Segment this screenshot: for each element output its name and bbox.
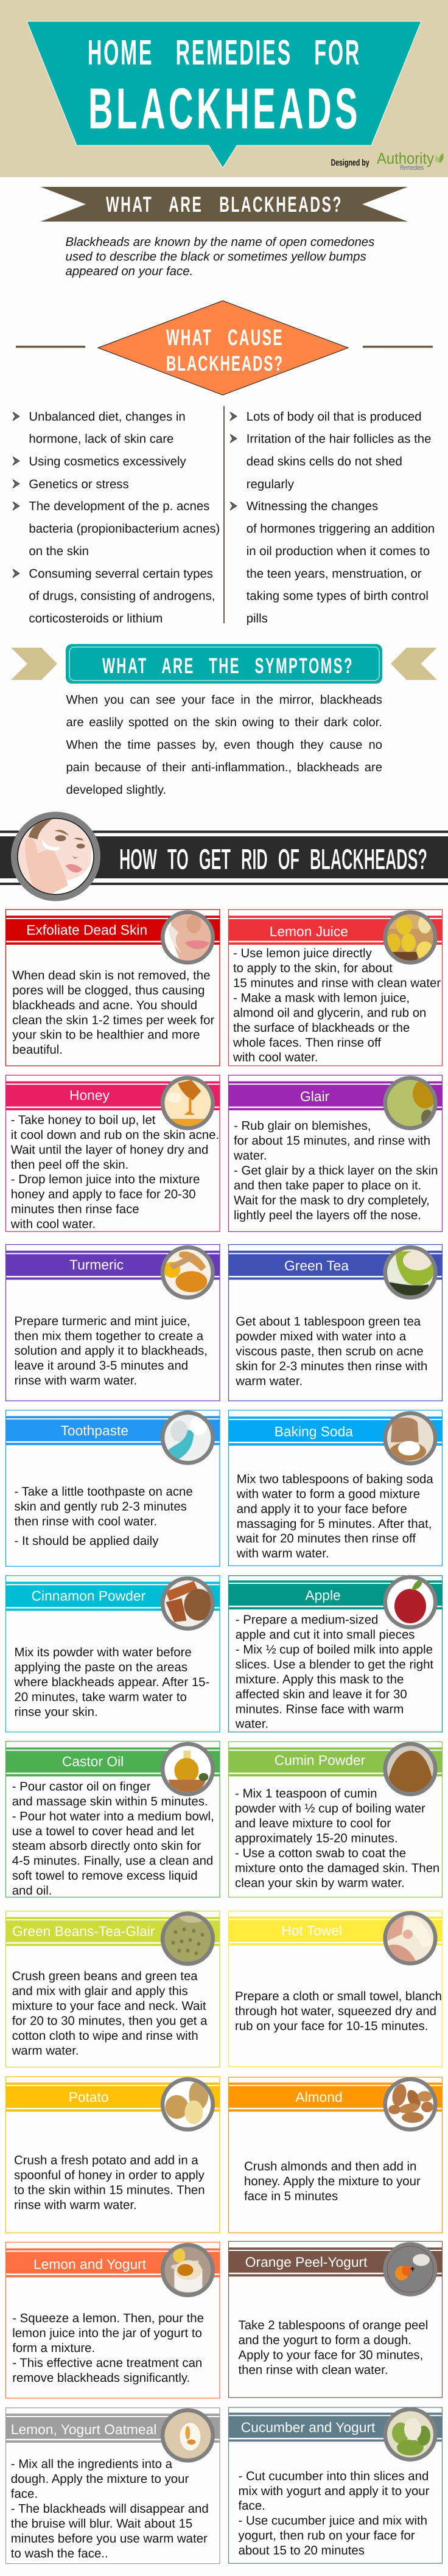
body text: clean the skin 1-2 times per week for [12, 1013, 214, 1027]
body text: where blackheads appear. After 15- [13, 1676, 209, 1689]
photo [161, 1909, 215, 1966]
panel: castor oil [6, 1741, 220, 1898]
causes list left: of drugs, consisting of androgens, [29, 590, 215, 603]
bullet arrows left [13, 412, 19, 578]
title speech bubble [27, 21, 421, 168]
body text: minutes then rinse face [11, 1203, 139, 1216]
body text: mixture. Apply this mask to the [236, 1673, 404, 1686]
header band [229, 2082, 442, 2112]
photo [383, 1411, 438, 1466]
body text: use a towel to cover head and let [12, 1825, 194, 1838]
causes list left: The development of the p. acnes [29, 500, 209, 513]
title [88, 33, 361, 141]
body text: - Take honey to boil up, let [11, 1113, 156, 1127]
title: Exfoliate Dead Skin [26, 922, 147, 938]
chevron left [11, 648, 57, 680]
body text: to the skin within 15 minutes. Then [14, 2184, 205, 2197]
body text: and massage skin within 5 minutes. [12, 1795, 208, 1808]
designed by credit: Designed by [331, 158, 369, 168]
body text: face in 5 minutes [244, 2189, 338, 2203]
divider line right [363, 346, 433, 348]
header band [6, 2413, 220, 2443]
body text: whole faces. Then rinse off [233, 1036, 381, 1049]
body text: and oil. [12, 1885, 52, 1898]
body text: Wait for the mask to dry completely, [234, 1194, 430, 1207]
photo [161, 1411, 215, 1465]
body text: form a mixture. [12, 2342, 95, 2355]
designed by credit: Authority [377, 149, 434, 167]
body text: 15 minutes and rinse with clean water [233, 976, 441, 990]
title: Turmeric [69, 1257, 124, 1273]
causes list right: of hormones triggering an addition [247, 522, 435, 536]
causes list right: Witnessing the changes [247, 500, 378, 513]
body text: remove blackheads significantly. [12, 2371, 190, 2385]
how to banner bar [0, 830, 448, 885]
body text: steam absorb directly onto skin for [12, 1839, 201, 1853]
body text: then rinse with cool water. [15, 1515, 157, 1528]
body text: cotton cloth to wipe and rinse with [12, 2029, 198, 2043]
body text: for 20 to 30 minutes, then you get a [12, 2015, 208, 2028]
body text: mix with yogurt and apply it to your [239, 2485, 430, 2498]
heading: what cause blackheads: WHAT CAUSE [166, 325, 284, 350]
panel: almond [229, 2077, 442, 2233]
panel: lemon yogurt oatmeal [6, 2408, 220, 2564]
body text: almond oil and glycerin, and rub on [233, 1006, 426, 1020]
body text: Take 2 tablespoons of orange peel [239, 2319, 428, 2333]
body text: powder mixed with water into a [236, 1330, 407, 1343]
heading: what cause blackheads [166, 325, 284, 376]
body text: skin and gently rub 2-3 minutes [15, 1500, 187, 1514]
body text: face. [239, 2499, 265, 2513]
causes list left: Unbalanced diet, changes in [29, 410, 186, 424]
panel: potato [6, 2077, 220, 2233]
panel: cucumber and yogurt [229, 2407, 442, 2563]
body text: honey and apply to face for 20-30 [11, 1188, 196, 1202]
causes list left: on the skin [29, 545, 89, 558]
definition paragraph: used to describe the black or sometimes yellow bumps [66, 250, 366, 264]
panel: exfoliate dead skin [6, 909, 220, 1066]
body text: 20 minutes, take warm water to [15, 1690, 187, 1704]
causes list right: dead skins cells do not shed [247, 455, 402, 468]
header band [229, 2413, 442, 2441]
photo [383, 2077, 438, 2132]
causes list left [13, 410, 220, 626]
header band [229, 1251, 442, 1279]
causes list right: pills [247, 612, 268, 626]
icon: leaves [435, 153, 444, 163]
causes list right: in oil production when it comes to [247, 545, 430, 558]
causes list left: corticosteroids or lithium [29, 612, 163, 626]
body text: rub on your face for 10-15 minutes. [235, 2020, 428, 2033]
title: Potato [69, 2089, 109, 2105]
causes list right: regularly [247, 478, 295, 491]
body text: - The blackheads will disappear and [11, 2502, 209, 2516]
definition paragraph: appeared on your face. [66, 265, 193, 278]
causes list left: Genetics or stress [29, 478, 129, 491]
photo [383, 2407, 438, 2462]
photo [161, 2408, 215, 2463]
photo [161, 910, 215, 965]
causes list left: bacteria (propionibacterium acnes) [29, 522, 220, 536]
photo [161, 2243, 215, 2297]
body text: and then take paper to place on it. [234, 1179, 421, 1192]
header band [229, 1081, 442, 1110]
body text: Mix its powder with water before [15, 1646, 192, 1659]
body text: skin for 2-3 minutes then rinse with [236, 1360, 427, 1373]
body text: blackheads and acne. You should [12, 999, 197, 1012]
body text: wait for 20 minutes then rinse off [236, 1532, 416, 1545]
header band [6, 1748, 220, 1776]
designed by credit: Remedies [400, 164, 424, 172]
body text: - Make a mask with lemon juice, [233, 992, 410, 1005]
title: Lemon Juice [270, 923, 348, 939]
body text: with cool water. [233, 1051, 318, 1065]
photo [161, 1742, 215, 1796]
photo [383, 1742, 438, 1796]
body text: Get about 1 tablespoon green tea [236, 1315, 421, 1328]
panel: hot towel [229, 1911, 442, 2067]
panel: cinnamon powder [6, 1576, 220, 1732]
photo [161, 2077, 215, 2132]
body text: yogurt, then rub on your face for [239, 2529, 415, 2543]
header band [229, 1580, 442, 1609]
title: Apple [305, 1587, 341, 1603]
symptoms paragraph [66, 693, 382, 797]
header band [229, 2247, 442, 2277]
panel: apple [229, 1575, 442, 1732]
title: Toothpaste [61, 1423, 128, 1438]
body text: minutes before you use warm water [11, 2532, 208, 2546]
body text [15, 1485, 193, 1548]
body text: through hot water, squeezed dry and [235, 2005, 436, 2018]
body text: then mix them together to create a [15, 1329, 204, 1343]
body text: to wash the face.. [11, 2547, 108, 2560]
body text: and leave mixture to cool for [235, 1817, 391, 1830]
panel: baking soda [229, 1410, 442, 1566]
body text: water. [235, 1718, 268, 1731]
title: Green Tea [284, 1258, 349, 1273]
symptoms paragraph: pain because of their anti-inflammation., blackheads are [66, 761, 382, 774]
body text: water. [233, 1149, 267, 1163]
body text: solution and apply it to blackheads, [15, 1345, 208, 1358]
body text: rinse with warm water. [15, 1374, 137, 1388]
body text: leave it around 3-5 minutes and [15, 1359, 188, 1373]
title: Almond [295, 2089, 343, 2105]
panel: lemon juice [229, 909, 442, 1066]
body text: - Pour castor oil on finger [12, 1780, 151, 1793]
body text: spoonful of honey in order to apply [14, 2169, 205, 2182]
body text: approximately 15-20 minutes. [235, 1832, 397, 1846]
body text: for about 15 minutes, and rinse with [234, 1135, 430, 1148]
body text: - Drop lemon juice into the mixture [11, 1173, 200, 1186]
header band [229, 1748, 442, 1776]
title: Cinnamon Powder [32, 1587, 146, 1603]
panel: glair [229, 1075, 442, 1231]
causes list right: Lots of body oil that is produced [247, 410, 422, 424]
body text: - Cut cucumber into thin slices and [239, 2469, 429, 2483]
body text: the bruise will blur. Wait about 15 [11, 2517, 192, 2530]
symptoms paragraph: are easlily spotted on the skin owing to their dark color. [66, 716, 382, 729]
causes list right [230, 410, 435, 626]
definition paragraph: Blackheads are known by the name of open comedones [66, 236, 374, 249]
body text: - Pour hot water into a medium bowl, [12, 1810, 214, 1823]
header band [229, 915, 442, 945]
title: Lemon, Yogurt Oatmeal [11, 2421, 156, 2437]
symptoms banner [66, 644, 382, 684]
header band [6, 915, 220, 945]
body text: lemon juice into the jar of yogurt to [12, 2327, 202, 2340]
body text: - Rub glair on blemishes, [234, 1119, 371, 1133]
body text: clean your skin by warm water. [235, 1877, 405, 1890]
title: Cucumber and Yogurt [241, 2419, 376, 2435]
body text: Prepare turmeric and mint juice, [15, 1315, 190, 1328]
body text: viscous paste, then scrub on acne [236, 1345, 424, 1358]
causes list right: Irritation of the hair follicles as the [247, 432, 431, 446]
panel: turmeric [6, 1245, 220, 1401]
column divider [223, 406, 225, 623]
body text: - This effective acne treatment can [12, 2357, 202, 2370]
bullet arrows right [230, 412, 237, 510]
body text: it cool down and rub on the skin acne. [11, 1129, 219, 1142]
symptoms paragraph: developed slightly. [66, 783, 166, 797]
body text: face. [11, 2488, 38, 2501]
body text: pores will be clogged, thus causing [12, 984, 205, 997]
body text: - Get glair by a thick layer on the skin [234, 1164, 438, 1177]
body text: - It should be applied daily [15, 1535, 159, 1548]
body text: with cool water. [10, 1218, 96, 1231]
body text: - Squeeze a lemon. Then, pour the [12, 2312, 204, 2325]
body text: warm water. [12, 2044, 79, 2057]
chevron right [391, 648, 437, 680]
header band [6, 2082, 220, 2112]
photo [383, 1575, 438, 1629]
body text: Mix two tablespoons of baking soda [237, 1472, 433, 1486]
body text: about 15 to 20 minutes [239, 2544, 365, 2558]
body text: and mix with glair and apply this [12, 1985, 188, 1998]
body text: honey. Apply the mixture to your [244, 2175, 421, 2188]
body text: beautiful. [12, 1043, 63, 1057]
causes list right: the teen years, menstruation, or [247, 567, 422, 581]
body text: applying the paste on the areas [15, 1661, 187, 1675]
body text: Crush green beans and green tea [12, 1970, 198, 1983]
header background [0, 0, 448, 177]
photo [383, 1911, 438, 1965]
title: Green Beans-Tea-Glair [12, 1923, 155, 1939]
body text: rinse with warm water. [14, 2199, 137, 2212]
body text: Wait until the layer of honey dry and [11, 1143, 208, 1157]
body text: apple and cut it into small pieces [236, 1628, 415, 1642]
body text: affected skin and leave it for 30 [236, 1688, 407, 1701]
panel: green beans tea glair [6, 1909, 220, 2067]
symptoms paragraph: When you can see your face in the mirror, blackheads [66, 693, 382, 707]
photo [383, 910, 438, 965]
divider line left [16, 346, 85, 348]
title: Hot Towel [281, 1923, 342, 1939]
body text: 4-5 minutes. Finally, use a clean and [12, 1855, 213, 1868]
header band [6, 1416, 220, 1445]
body text: - Use lemon juice directly [233, 947, 373, 961]
body text: lightly peel the layers off the nose. [234, 1209, 421, 1222]
body text: then rinse with clean water. [239, 2364, 388, 2377]
body text: dough. Apply the mixture to your [11, 2473, 189, 2486]
body text: mixture onto the damaged skin. Then [235, 1861, 439, 1875]
photo: woman's face [11, 812, 100, 901]
causes list left: hormone, lack of skin care [29, 432, 173, 446]
causes list right: taking some types of birth control [247, 590, 429, 603]
photo [161, 1245, 215, 1300]
panel: honey [6, 1075, 220, 1231]
body text: the surface of blackheads or the [233, 1021, 410, 1035]
title: Lemon and Yogurt [33, 2256, 147, 2272]
body text: mixture to your face and neck. Wait [12, 2000, 206, 2013]
body text: and apply it to your face before [237, 1502, 407, 1516]
body text: and the yogurt to form a dough. [239, 2334, 411, 2347]
body text: slices. Use a blender to get the right [236, 1658, 433, 1671]
header band [229, 1416, 442, 1446]
body text: - Mix all the ingredients into a [11, 2458, 173, 2471]
panel: lemon and yogurt [6, 2242, 220, 2398]
title: Castor Oil [62, 1753, 124, 1769]
designed by credit [331, 149, 444, 172]
body text: - Mix ½ cup of boiled milk into apple [236, 1643, 433, 1656]
photo [383, 1076, 438, 1130]
panel: cumin powder [229, 1741, 442, 1897]
body text: - Use cucumber juice and mix with [239, 2515, 427, 2528]
body text: - Take a little toothpaste on acne [15, 1485, 193, 1499]
panel: green tea [229, 1245, 442, 1401]
diamond: what cause blackheads [98, 301, 348, 395]
header band [6, 1251, 220, 1279]
body text: warm water. [235, 1374, 303, 1388]
header band [6, 1582, 220, 1611]
body text: then peel off the skin. [11, 1158, 128, 1172]
body text: with warm water. [236, 1547, 329, 1561]
panel: toothpaste [6, 1410, 220, 1566]
photo [161, 1577, 215, 1631]
body text: soft towel to remove excess liquid [12, 1869, 198, 1883]
photo [161, 1076, 215, 1130]
ribbon: what are blackheads [41, 187, 408, 222]
photo [383, 2242, 438, 2297]
body text: Apply to your face for 30 minutes, [239, 2349, 423, 2362]
body text: - Mix 1 teaspoon of cumin [235, 1787, 377, 1801]
body text: rinse your skin. [15, 1706, 98, 1719]
heading: what cause blackheads: BLACKHEADS? [166, 352, 284, 376]
panel: orange peel yogurt [229, 2241, 442, 2398]
body text: Prepare a cloth or small towel, blanch [235, 1990, 442, 2003]
title: Orange Peel-Yogurt [245, 2254, 368, 2270]
body text: Crush a fresh potato and add in a [14, 2154, 198, 2168]
title: Honey [69, 1087, 110, 1103]
photo [383, 1245, 438, 1300]
body text: massaging for 5 minutes. After that, [237, 1517, 432, 1531]
body text: minutes. Rinse face with warm [236, 1703, 404, 1716]
header band [229, 1917, 442, 1945]
causes list left: Using cosmetics excessively [29, 455, 187, 468]
body text: - Use a cotton swab to coat the [235, 1847, 406, 1860]
header band [6, 2249, 220, 2277]
header band [6, 1081, 220, 1110]
body text: your skin to be healthier and more [12, 1029, 200, 1042]
header band [6, 1917, 220, 1946]
body text: When dead skin is not removed, the [12, 969, 210, 982]
title: Cumin Powder [275, 1752, 366, 1768]
body text: with water to form a good mixture [236, 1488, 420, 1501]
body text: powder with ½ cup of boiling water [235, 1802, 425, 1816]
causes list left: Consuming severral certain types [29, 567, 213, 581]
title: Baking Soda [275, 1424, 353, 1440]
body text: - Prepare a medium-sized [236, 1613, 378, 1626]
title: Glair [300, 1088, 330, 1104]
body text: to apply to the skin, for about [233, 962, 393, 975]
body text: Crush almonds and then add in [244, 2160, 416, 2173]
symptoms paragraph: When the time passes by, even though they cause no [66, 738, 382, 752]
